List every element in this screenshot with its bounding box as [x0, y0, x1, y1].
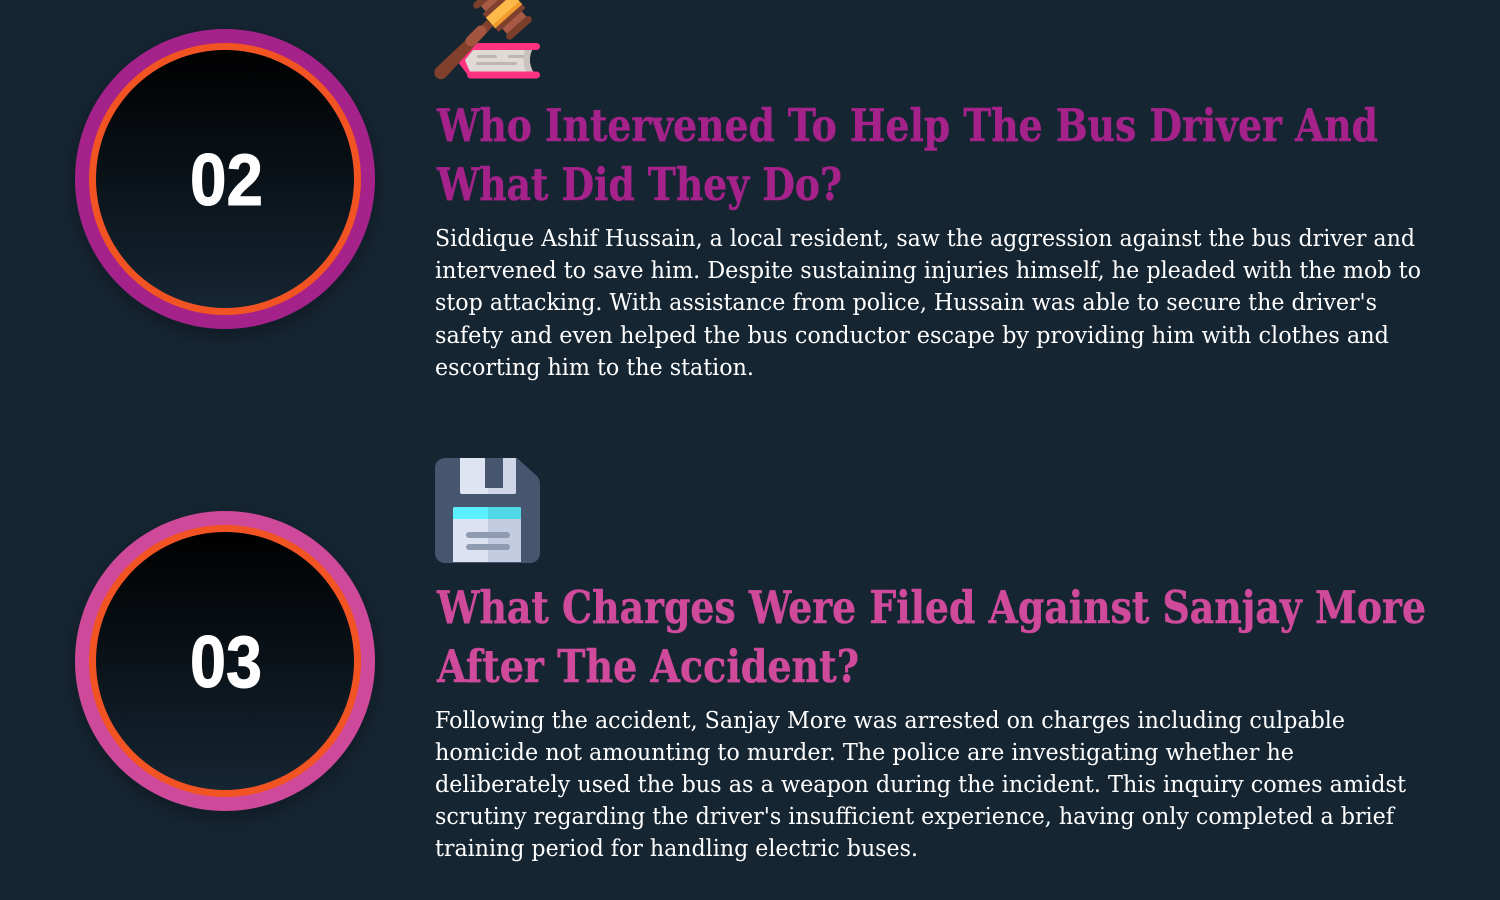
badge: number 03: [75, 511, 375, 811]
text block: answer 3: [435, 708, 1407, 862]
text block: answer 2: intervened to save him. Despite sustaining injuries himself, he pleaded with the mob to: [435, 258, 1421, 284]
text block: answer 3: deliberately used the bus as a weapon during the incident. This inquiry comes amidst: [435, 772, 1407, 798]
heading: question 3: After The Accident?: [436, 640, 859, 693]
text block: answer 2: stop attacking. With assistance from police, Hussain was able to secure the driver's: [435, 290, 1377, 316]
heading: question 2: What Did They Do?: [436, 158, 842, 211]
badge: number 03: 03: [190, 622, 262, 703]
text block: answer 2: safety and even helped the bus conductor escape by providing him with clothes and: [435, 323, 1389, 349]
text block: answer 3: training period for handling electric buses.: [435, 836, 918, 862]
text block: answer 2: [435, 226, 1421, 381]
text block: answer 2: Siddique Ashif Hussain, a local resident, saw the aggression against the bus driver and: [435, 226, 1415, 252]
icon: floppy disk: [435, 458, 540, 563]
heading: question 3: [436, 581, 1426, 693]
icon: gavel on book: [434, 0, 540, 79]
heading: question 2: [436, 99, 1378, 211]
text block: answer 2: escorting him to the station.: [435, 355, 754, 381]
text block: answer 3: scrutiny regarding the driver's insufficient experience, having only completed a brief: [435, 804, 1395, 830]
badge: number 02: 02: [190, 140, 263, 221]
badge: number 02: [75, 29, 375, 329]
text block: answer 3: Following the accident, Sanjay More was arrested on charges including culpable: [435, 708, 1345, 734]
text block: answer 3: homicide not amounting to murder. The police are investigating whether he: [435, 740, 1294, 766]
